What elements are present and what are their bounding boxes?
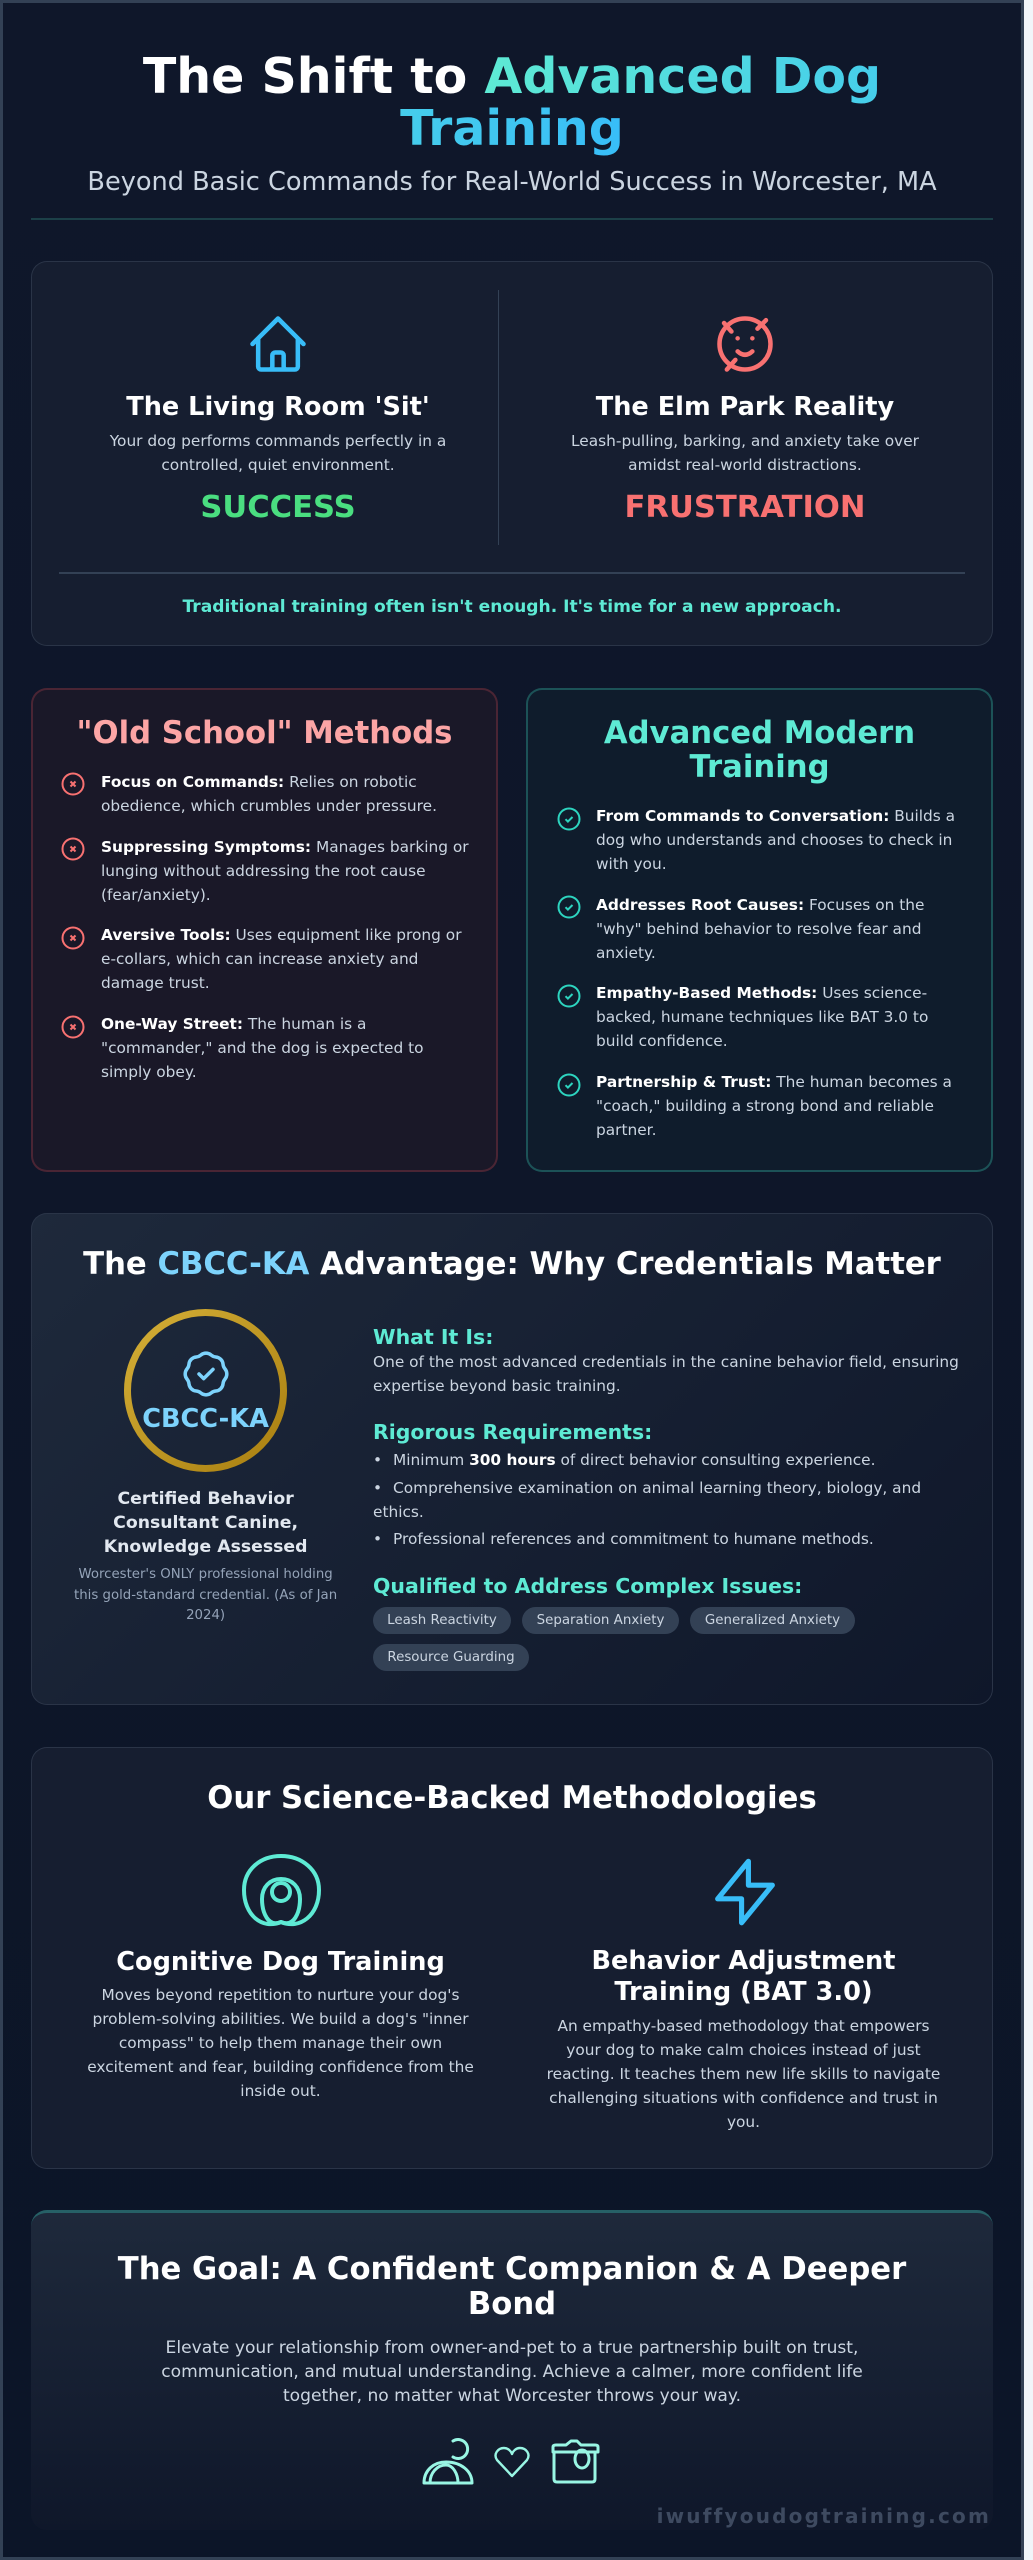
text: cognitive training (87, 1986, 474, 2100)
text: suppressing symptoms: (fear/anxiety). (101, 886, 211, 904)
text: living room description: Your dog performs commands perfectly in a (110, 432, 446, 450)
text: BAT: challenging situations with confidence and trust in (549, 2089, 938, 2107)
icon: lightning bolt (715, 1858, 775, 1926)
text: BAT (547, 2017, 940, 2131)
bullet: examination (373, 1479, 921, 1521)
heading: old school: "Old School" Methods (77, 716, 452, 750)
text: suppressing symptoms: lunging without addressing the root cause (101, 862, 426, 880)
bullet: references: • (373, 1530, 382, 1548)
text: what it is: expertise beyond basic training. (373, 1377, 621, 1395)
title (143, 48, 881, 157)
heading: living room: The Living Room 'Sit' (126, 392, 430, 422)
text: one-way street (101, 1015, 424, 1081)
heading: the goal (118, 2252, 906, 2322)
text: living room description: controlled, quiet environment. (161, 456, 395, 474)
text: BAT: you. (727, 2113, 760, 2131)
heading: rigorous requirements: Rigorous Requirements: (373, 1420, 652, 1444)
text: focus on commands: obedience, which crumbles under pressure. (101, 797, 437, 815)
text: one-way street: simply obey. (101, 1063, 197, 1081)
text: BAT: your dog to make calm choices instead of just (566, 2041, 921, 2059)
text: cognitive training: compass" to help them manage their own (119, 2034, 442, 2052)
text: aversive tools (101, 926, 462, 992)
watermark: iwuffyoudogtraining.com (657, 2504, 991, 2528)
bullet: examination: • (373, 1479, 382, 1497)
icon: check circle (558, 984, 580, 1008)
heading: advanced modern training (604, 716, 915, 784)
text: aversive tools: Aversive Tools: Uses equipment like prong or (101, 926, 462, 944)
text: credential name: Certified Behavior (117, 1489, 294, 1509)
heading: methodologies: Our Science-Backed Methodologies (207, 1780, 817, 1816)
text: empathy-based methods: Empathy-Based Methods: Uses science- (596, 984, 927, 1002)
column divider (498, 290, 499, 545)
panel: CBCC-KA advantage (31, 1213, 993, 1705)
label: success: SUCCESS (200, 490, 356, 524)
heading: complex issues: Qualified to Address Complex Issues: (373, 1574, 802, 1598)
text: empathy-based methods (596, 984, 928, 1050)
text: what it is (373, 1353, 959, 1395)
icon: x circle (62, 772, 84, 796)
text: commands to conversation: dog who understands and chooses to check in (596, 831, 952, 849)
text: what it is: One of the most advanced credentials in the canine behavior field, ensuring (373, 1353, 959, 1371)
text: aversive tools: damage trust. (101, 974, 210, 992)
text: BAT: An empathy-based methodology that empowers (557, 2017, 930, 2035)
text: commands to conversation: with you. (596, 855, 667, 873)
icon: dog box (553, 2441, 598, 2482)
heading: the goal: The Goal: A Confident Companion & A Deeper (118, 2252, 906, 2286)
tag: resource guarding (373, 1644, 529, 1671)
heading: cognitive training: Cognitive Dog Training (116, 1946, 445, 1976)
text: root causes (596, 896, 924, 962)
text: suppressing symptoms (101, 838, 469, 904)
heading: BAT (591, 1946, 896, 2007)
text: cognitive training: excitement and fear, building confidence from the (87, 2058, 474, 2076)
text: aversive tools: e-collars, which can increase anxiety and (101, 950, 418, 968)
bullet: references: Professional references and commitment to humane methods. (393, 1530, 874, 1548)
horizontal divider (59, 572, 965, 574)
icon: x circle (62, 1016, 84, 1038)
tag: generalized anxiety: Generalized Anxiety (705, 1613, 840, 1628)
text: the goal (161, 2338, 863, 2406)
text: partnership and trust: partner. (596, 1121, 656, 1139)
icons: owner, heart, dog (422, 2438, 600, 2484)
text: credential note: Worcester's ONLY professional holding (78, 1567, 333, 1582)
text: credential note: 2024) (186, 1608, 225, 1623)
text: elm park description: Leash-pulling, barking, and anxiety take over (571, 432, 919, 450)
text: cognitive training: inside out. (240, 2082, 321, 2100)
tag: generalized anxiety (690, 1607, 855, 1634)
icon: x circle (62, 838, 84, 860)
icon: check circle (558, 896, 580, 918)
text: focus on commands: Focus on Commands: Relies on robotic (101, 773, 417, 791)
text: commands to conversation (596, 807, 955, 873)
text: the goal: Elevate your relationship from owner-and-pet to a true partnership built on trust, (166, 2338, 858, 2358)
text: credential name: Knowledge Assessed (104, 1537, 308, 1557)
text: credential note: this gold-standard credential. (As of Jan (74, 1588, 337, 1602)
text: elm park description (571, 432, 919, 474)
heading: CBCC-KA advantage: The CBCC-KA Advantage: Why Credentials Matter (83, 1246, 941, 1282)
icon: person (424, 2440, 472, 2483)
text: one-way street: One-Way Street: The human is a (101, 1015, 366, 1033)
text: partnership and trust: "coach," building a strong bond and reliable (596, 1097, 934, 1115)
bullet: hours: • (373, 1451, 382, 1469)
text: root causes: anxiety. (596, 944, 656, 962)
panel: old school methods (31, 688, 498, 1172)
bullet: examination: ethics. (373, 1503, 424, 1521)
text: cognitive training: Moves beyond repetition to nurture your dog's (101, 1986, 460, 2004)
text: BAT: reacting. It teaches them new life skills to navigate (547, 2065, 940, 2083)
text: suppressing symptoms: Suppressing Symptoms: Manages barking or (101, 838, 469, 856)
text: elm park description: amidst real-world distractions. (628, 456, 862, 474)
text: living room description (110, 432, 446, 474)
icon: inner compass (242, 1854, 321, 1926)
badge ring (124, 1309, 287, 1472)
text: one-way street: "commander," and the dog is expected to (101, 1039, 424, 1057)
text: partnership and trust: Partnership & Trust: The human becomes a (596, 1073, 952, 1091)
panel: advanced modern training (526, 688, 993, 1172)
text: cognitive training: problem-solving abilities. We build a dog's "inner (92, 2010, 469, 2028)
panel: methodologies (31, 1747, 993, 2169)
text: credential note (74, 1567, 337, 1623)
text: root causes: Addresses Root Causes: Focuses on the (596, 896, 924, 914)
text: partnership and trust (596, 1073, 952, 1139)
text: root causes: "why" behind behavior to resolve fear and (596, 920, 921, 938)
text: the goal: communication, and mutual understanding. Achieve a calmer, more confident life (161, 2362, 863, 2382)
heading: what it is: What It Is: (373, 1325, 493, 1349)
icon: house (250, 316, 306, 372)
icon: check circle (558, 808, 580, 830)
tag: resource guarding: Resource Guarding (387, 1650, 515, 1665)
icon: check circle (558, 1074, 580, 1096)
header rule (31, 218, 993, 220)
tag: leash reactivity (373, 1607, 511, 1634)
text: empathy-based methods: build confidence. (596, 1032, 728, 1050)
text: the goal: together, no matter what Worcester throws your way. (283, 2386, 741, 2406)
tag: leash reactivity: Leash Reactivity (387, 1613, 497, 1628)
icon: x circle (62, 926, 84, 950)
text: empathy-based methods: backed, humane techniques like BAT 3.0 to (596, 1008, 928, 1026)
panel: living room vs real world (31, 261, 993, 646)
icon: frustrated face (717, 316, 773, 372)
heading: advanced modern training: Advanced Modern (604, 716, 915, 750)
text: credential name: Consultant Canine, (113, 1513, 298, 1533)
heading: BAT: Training (BAT 3.0) (614, 1977, 873, 2007)
heading: the goal: Bond (468, 2286, 556, 2322)
tag: separation anxiety (522, 1607, 679, 1634)
icon: heart (496, 2448, 528, 2476)
heading: BAT: Behavior Adjustment (591, 1946, 896, 1976)
subtitle: Beyond Basic Commands for Real-World Success in Worcester, MA (87, 167, 937, 197)
label: frustration: FRUSTRATION (625, 490, 865, 524)
callout: new approach: Traditional training often isn't enough. It's time for a new approach. (182, 597, 842, 617)
title: Training (400, 100, 624, 157)
text: focus on commands (101, 773, 437, 815)
heading: elm park: The Elm Park Reality (596, 392, 894, 422)
text: credential name (104, 1489, 308, 1557)
badge label: CBCC-KA (142, 1404, 269, 1434)
bullet: examination: Comprehensive examination on animal learning theory, biology, and (393, 1479, 921, 1497)
tag: separation anxiety: Separation Anxiety (537, 1613, 664, 1628)
icon: verified badge (183, 1351, 229, 1397)
panel: the goal (31, 2210, 993, 2530)
text: commands to conversation: From Commands to Conversation: Builds a (596, 807, 955, 825)
heading: advanced modern training: Training (689, 750, 830, 784)
bullet: hours: Minimum 300 hours of direct behavior consulting experience. (393, 1451, 876, 1469)
title: The Shift to Advanced Dog (143, 48, 881, 105)
